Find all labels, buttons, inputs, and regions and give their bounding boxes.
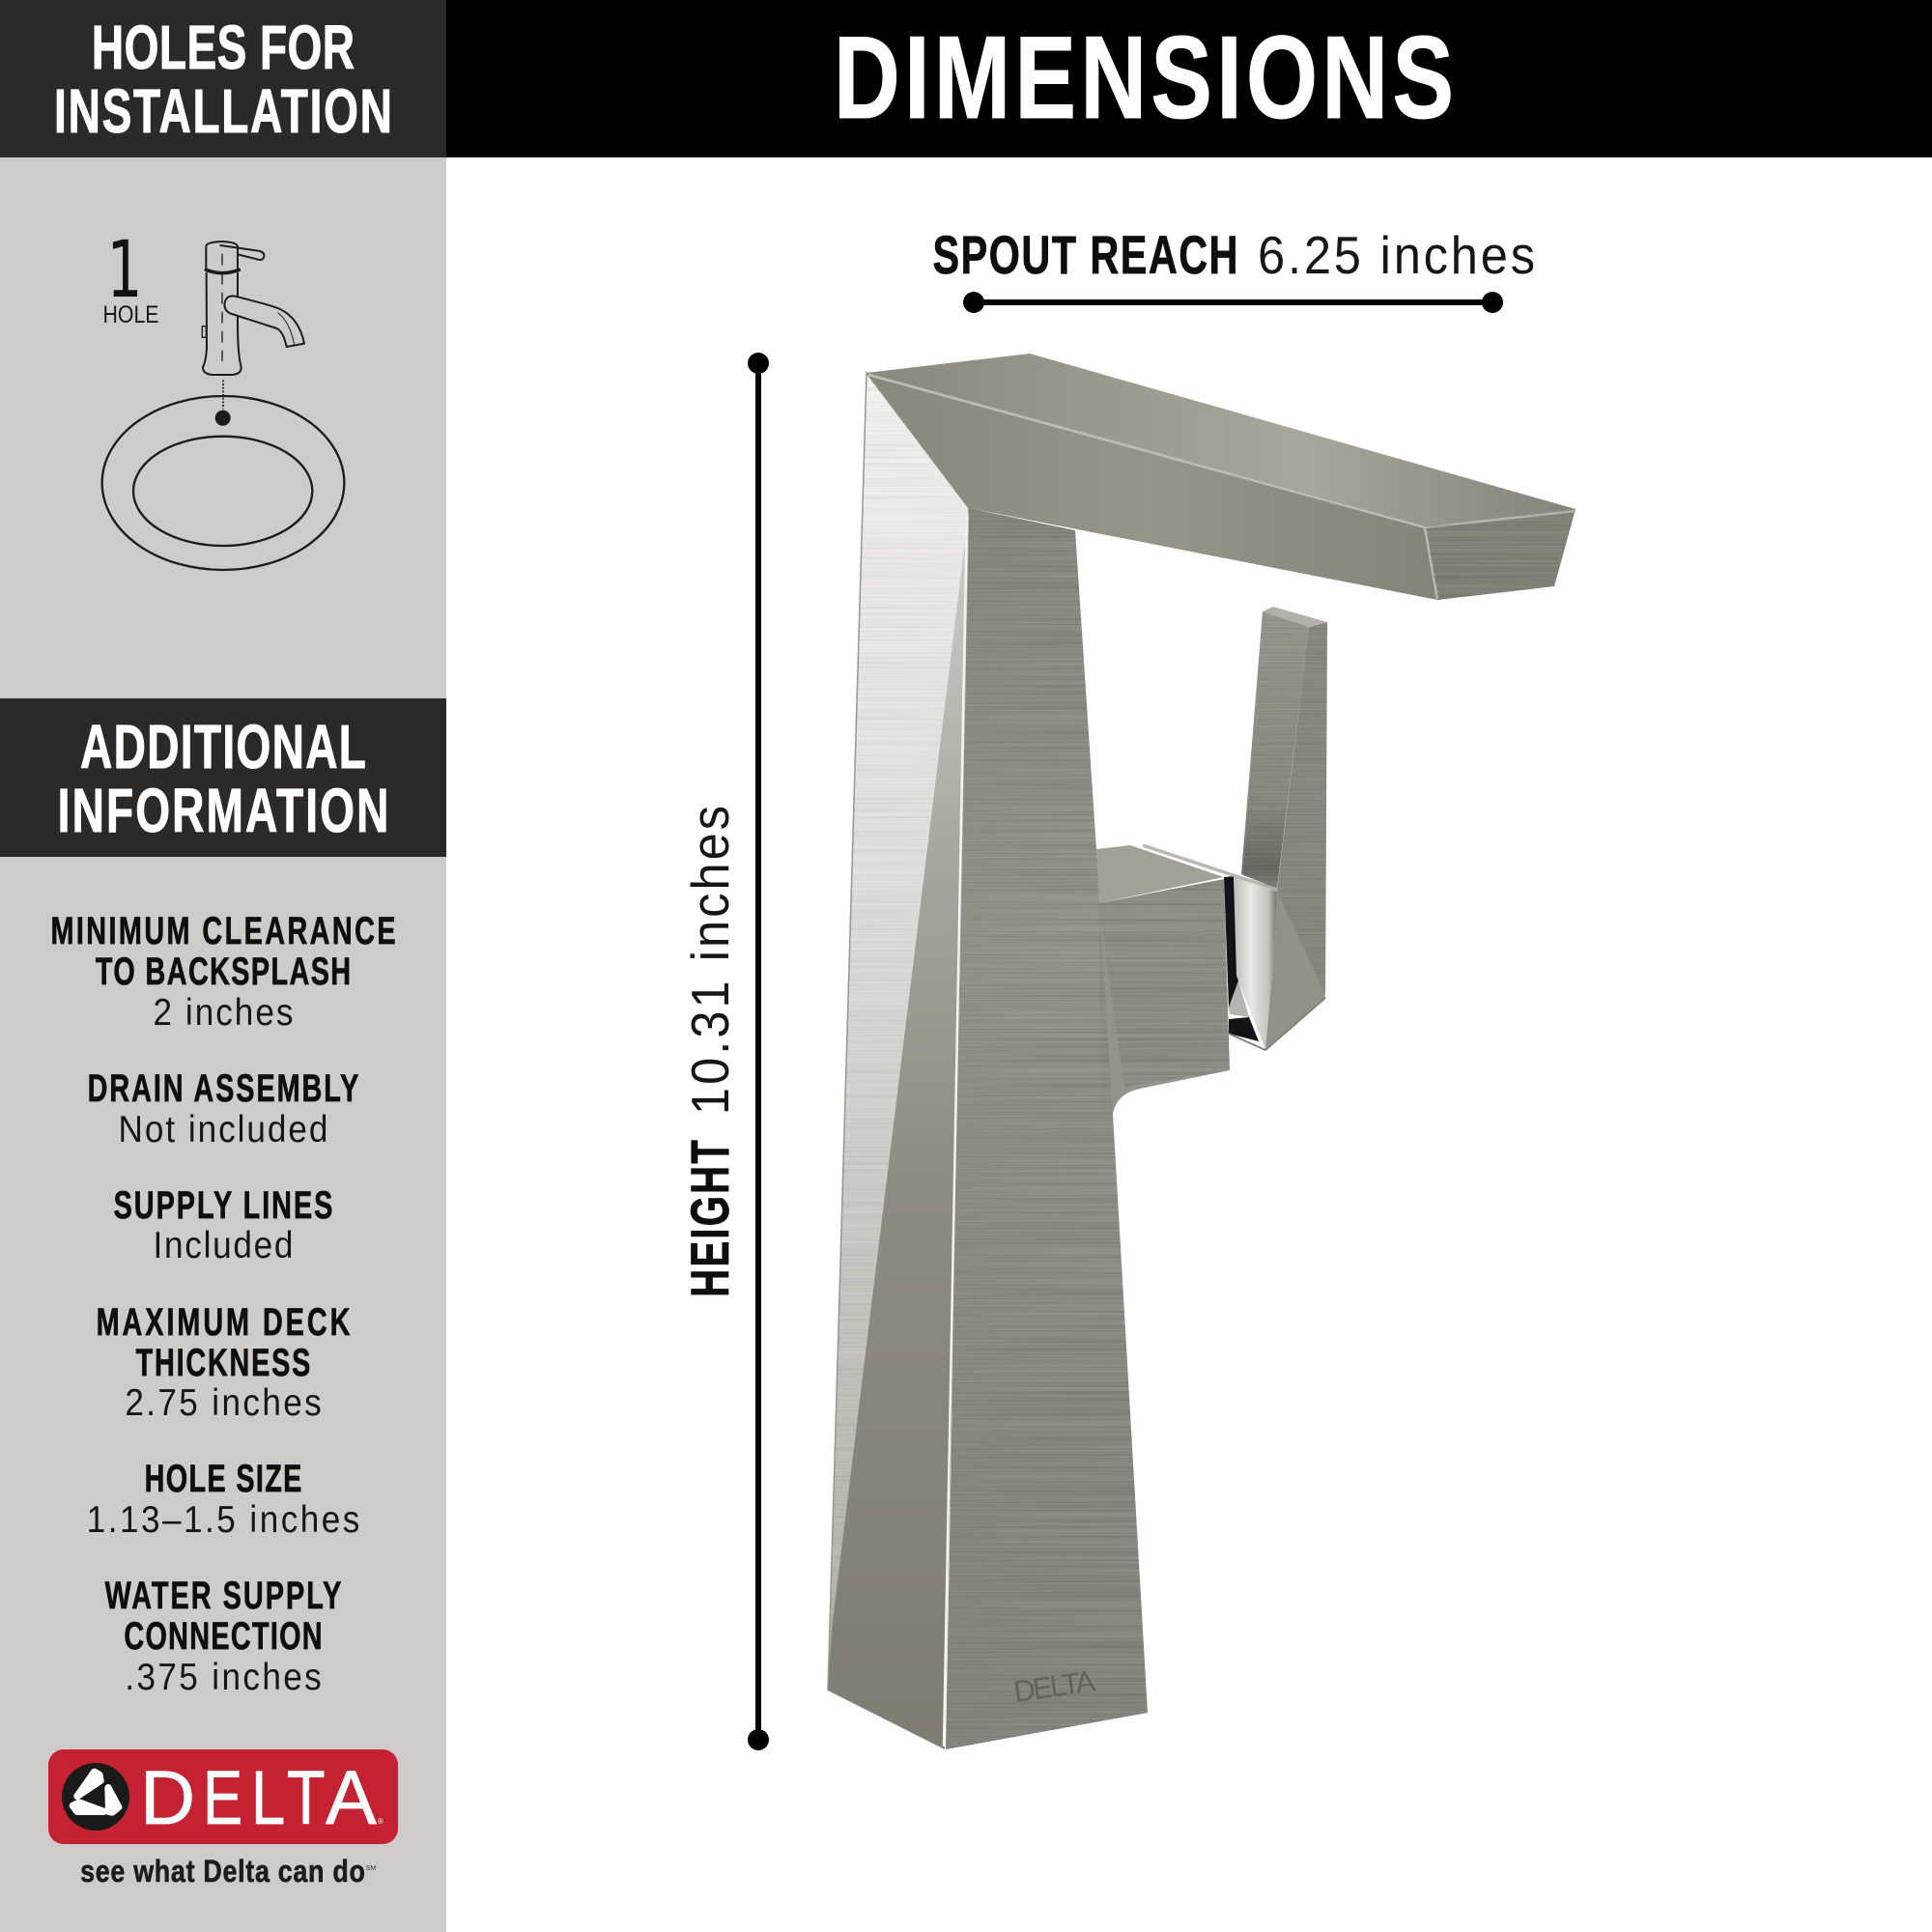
- spec: maximum deck thickness: [97, 1300, 350, 1423]
- title bar: dimensions: DIMENSIONS: [834, 13, 1454, 144]
- spec: water supply connection: .375 inches: [125, 1655, 322, 1697]
- faucet: [821, 354, 1594, 1758]
- dimension: height: [681, 353, 769, 1750]
- faucet handle base: front face: [1098, 879, 1230, 1114]
- spec: drain assembly: [88, 1066, 358, 1150]
- spec: maximum deck thickness: THICKNESS: [136, 1341, 310, 1384]
- dimension: spout reach: 6.25 inches: [1258, 226, 1535, 285]
- spec: hole size: HOLE SIZE: [145, 1457, 301, 1500]
- faucet handle: thin plate: [1143, 845, 1277, 890]
- wordmark: delta: D: [140, 1754, 195, 1840]
- tagline: SM: [366, 1865, 376, 1872]
- engraved delta mark: DELTA: [1011, 1663, 1097, 1709]
- spec: minimum clearance: 2 inches: [154, 990, 293, 1033]
- spec: maximum deck thickness: 2.75 inches: [125, 1380, 322, 1423]
- icon: faucet line drawing: [202, 242, 304, 375]
- dimension: height: 10.31 inches: [681, 806, 740, 1115]
- tagline: see what Delta can do: [80, 1855, 365, 1889]
- faucet body: main front face: [946, 508, 1148, 1749]
- faucet handle: polished wedge: [1234, 876, 1277, 1050]
- spec: supply lines: [114, 1183, 332, 1265]
- brushed metal texture: [946, 508, 1575, 1748]
- faucet spout: end face: [1425, 509, 1576, 600]
- faucet body: shaded lower facet: [828, 510, 969, 1749]
- spec: supply lines: Included: [154, 1223, 293, 1265]
- faucet body: bright left facet: [828, 373, 969, 1690]
- wordmark: delta: [140, 1754, 377, 1841]
- faucet spout: top face: [867, 354, 1576, 526]
- spec: drain assembly: Not included: [119, 1107, 327, 1150]
- faucet spout: edge highlights: [868, 375, 1576, 599]
- wordmark: delta: A: [326, 1754, 377, 1840]
- faucet handle: lower lip: [1229, 998, 1325, 1050]
- faucet spout: front face: [867, 373, 1437, 600]
- faucet handle: inner notch: [1229, 980, 1249, 1017]
- logo: delta: [48, 1749, 398, 1844]
- spec: minimum clearance: TO BACKSPLASH: [96, 950, 351, 993]
- wordmark: delta: L: [251, 1755, 285, 1841]
- header: additional information: INFORMATION: [58, 777, 388, 845]
- panel: sidebar: [0, 0, 446, 1932]
- wordmark: delta: E: [203, 1756, 242, 1841]
- label: 1 hole: HOLE: [102, 301, 158, 328]
- spec: water supply connection: WATER SUPPLY: [105, 1574, 341, 1617]
- header: additional information: [0, 698, 446, 857]
- spec: water supply connection: [105, 1574, 341, 1697]
- icon: delta emblem: [62, 1763, 129, 1831]
- dimension: height: HEIGHT: [681, 1140, 741, 1297]
- faucet handle: dark gap: [1224, 876, 1239, 1008]
- header: holes for installation: INSTALLATION: [54, 77, 392, 146]
- spec: minimum clearance: [50, 909, 396, 1033]
- header: holes for installation: [0, 0, 446, 157]
- faucet handle: lever left face: [1241, 611, 1309, 889]
- label: 1 hole: 1: [106, 225, 143, 316]
- faucet body: ridge highlight: [944, 512, 967, 1747]
- dimension: spout reach: [933, 225, 1535, 313]
- title bar: dimensions: [446, 0, 1932, 157]
- spec: drain assembly: DRAIN ASSEMBLY: [88, 1066, 358, 1110]
- header: holes for installation: HOLES FOR: [92, 14, 355, 82]
- spec: hole size: [87, 1457, 359, 1540]
- spec: maximum deck thickness: MAXIMUM DECK: [97, 1300, 350, 1344]
- icon: sink basin: [102, 380, 344, 570]
- faucet handle: lower dark gap: [1229, 1017, 1259, 1041]
- wordmark: delta: T: [287, 1756, 326, 1840]
- spec: hole size: 1.13–1.5 inches: [87, 1497, 359, 1540]
- faucet handle: lever right face: [1277, 622, 1327, 995]
- header: additional information: ADDITIONAL: [80, 713, 366, 781]
- faucet handle base: top face: [1096, 845, 1224, 903]
- faucet handle: lever top: [1263, 607, 1327, 627]
- faucet handle: lower right wedge: [1265, 892, 1325, 1050]
- spec: minimum clearance: MINIMUM CLEARANCE: [50, 909, 396, 952]
- logo: delta: ®: [378, 1817, 384, 1826]
- dimension: spout reach: SPOUT REACH: [933, 225, 1237, 286]
- brushed metal texture: bright facet: [829, 383, 968, 1674]
- icon: one hole installation diagram: [102, 225, 344, 570]
- spec: water supply connection: CONNECTION: [124, 1614, 323, 1658]
- spec: supply lines: SUPPLY LINES: [114, 1183, 332, 1227]
